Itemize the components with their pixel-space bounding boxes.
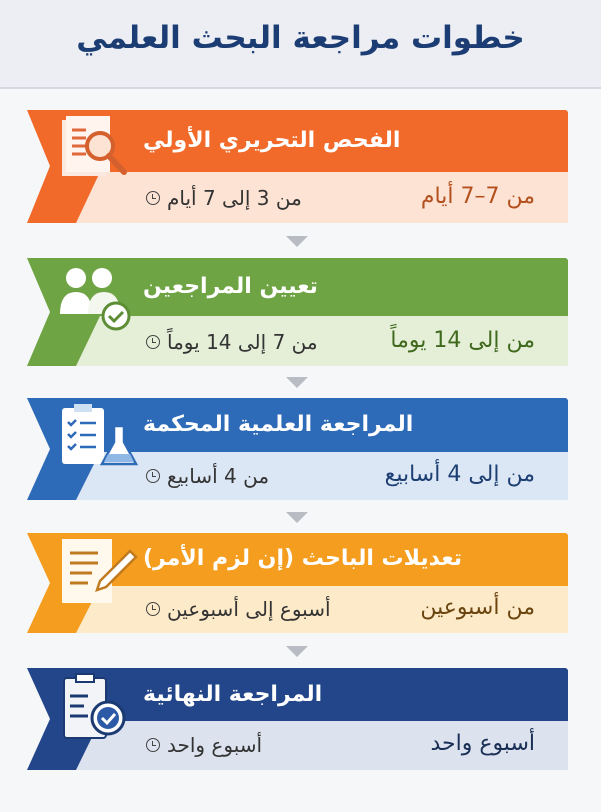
panel: step 4: تعديلات الباحث (إن لزم الأمر) xyxy=(143,546,462,571)
panel: step 4: من أسبوعين xyxy=(420,595,535,620)
panel: step 2: من إلى 14 يوماً xyxy=(390,328,535,353)
panel: step 4 xyxy=(27,533,568,633)
panel: step 3: من إلى 4 أسابيع xyxy=(385,462,535,487)
arrow xyxy=(286,512,308,523)
header band xyxy=(0,0,601,89)
panel: step 5: أسبوع واحد xyxy=(167,733,262,757)
panel: step 3: المراجعة العلمية المحكمة xyxy=(143,412,413,437)
arrow xyxy=(286,646,308,657)
arrow xyxy=(286,377,308,388)
panel: step 4: أسبوع إلى أسبوعين xyxy=(167,597,331,621)
panel: step 1 xyxy=(27,110,568,223)
panel: step 1: الفحص التحريري الأولي xyxy=(143,128,400,153)
panel: step 1: من 3 إلى 7 أيام xyxy=(167,186,302,210)
panel: step 5 xyxy=(27,668,568,770)
panel: step 3 xyxy=(27,398,568,500)
title: خطوات مراجعة البحث العلمي xyxy=(76,20,525,56)
panel: step 2: تعيين المراجعين xyxy=(143,274,318,299)
panel: step 2: من 7 إلى 14 يوماً xyxy=(167,330,318,354)
panel: step 2 xyxy=(27,258,568,366)
panel: step 5: المراجعة النهائية xyxy=(143,682,322,707)
panel: step 5: أسبوع واحد xyxy=(430,731,535,756)
panel: step 1: من 7–7 أيام xyxy=(421,184,535,209)
panel: step 3: من 4 أسابيع xyxy=(167,464,269,488)
arrow xyxy=(286,236,308,247)
